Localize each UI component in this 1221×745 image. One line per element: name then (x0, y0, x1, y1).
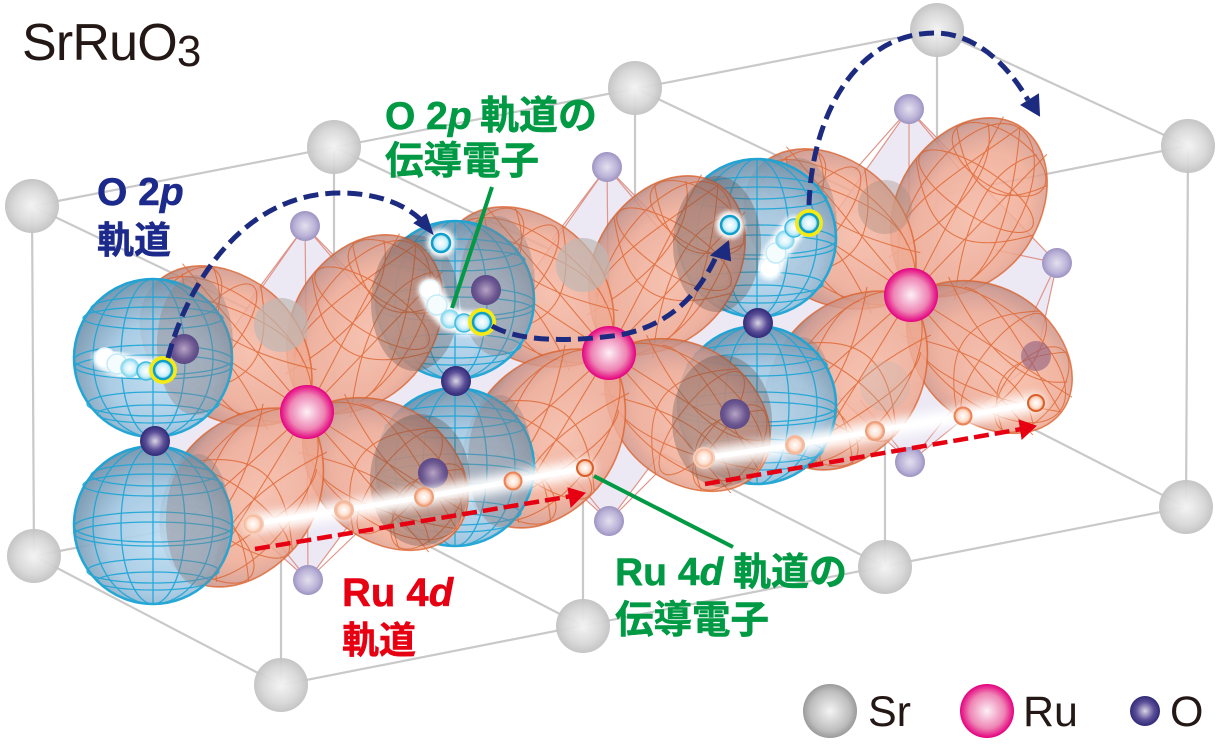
inner strontium atoms (254, 180, 912, 411)
label: O 2p conduction electron (385, 95, 597, 183)
label: Ru 4d conduction electron: Ru 4d (615, 551, 723, 594)
O 2p orbitals, first cell (73, 275, 233, 605)
legend (803, 684, 1203, 738)
label: O 2p conduction electron: 軌道の (480, 95, 597, 138)
title: 3 (177, 27, 201, 76)
label: Ru 4d conduction electron (615, 551, 847, 642)
label: Ru 4d conduction electron: 伝導電子 (615, 599, 769, 642)
label: Ru 4d orbital: 軌道 (342, 620, 416, 661)
O 2p conduction electron trail, centre (420, 280, 496, 336)
Ru 4d conduction electron trail, left (243, 460, 593, 534)
oxygen octahedra (154, 109, 1057, 580)
O 2p orbitals, third cell (677, 158, 837, 485)
Ru 4d orbitals, second cell right lobes (550, 146, 801, 523)
arrow: O 2p hop, second (492, 242, 730, 339)
label: Ru 4d orbital (342, 571, 455, 661)
arrow: Ru 4d conduction, left (255, 488, 585, 549)
label: O 2p orbital: O 2p (97, 171, 184, 214)
legend: Sr (803, 684, 911, 738)
Ru 4d orbitals, second cell left lobes (410, 173, 667, 560)
arrow: O 2p hop, first (168, 193, 432, 358)
rear oxygen atoms (169, 94, 1072, 595)
Ru 4d orbitals, first cell right lobes (248, 205, 499, 582)
label: Ru 4d orbital: Ru 4d (342, 571, 455, 615)
label: Ru 4d conduction electron: 軌道の (733, 552, 847, 594)
label: O 2p orbital (97, 171, 184, 261)
O 2p orbitals, second cell (375, 216, 535, 547)
Ru 4d conduction electron trail, right (694, 395, 1044, 468)
title: SrRuO (22, 14, 177, 72)
hopped electron, centre cell (427, 229, 455, 257)
hopped electron, right cell (716, 211, 744, 239)
leader line: Ru 4d electron (594, 476, 733, 547)
apex oxygen atoms (140, 308, 773, 456)
Ru 4d orbitals, first cell left lobes (108, 232, 365, 619)
label: O 2p conduction electron: 伝導電子 (385, 140, 539, 183)
legend: O (1130, 688, 1203, 736)
legend: Sr: Sr (868, 688, 911, 736)
legend: O: O (1170, 688, 1203, 736)
O 2p conduction electron trail, right (760, 209, 823, 278)
label: O 2p orbital: 軌道 (97, 220, 171, 261)
arrow: Ru 4d conduction, right (705, 420, 1036, 484)
legend: Ru (960, 684, 1078, 738)
Ru 4d orbitals, third cell rear lobes (712, 88, 1103, 502)
O 2p conduction electron trail, left (95, 348, 177, 384)
ruthenium atoms (280, 268, 938, 439)
legend: Ru: Ru (1023, 688, 1078, 736)
leader line: O 2p electron (452, 187, 492, 308)
arrow: O 2p hop, third (809, 33, 1039, 205)
label: O 2p conduction electron: O 2p (385, 95, 472, 138)
